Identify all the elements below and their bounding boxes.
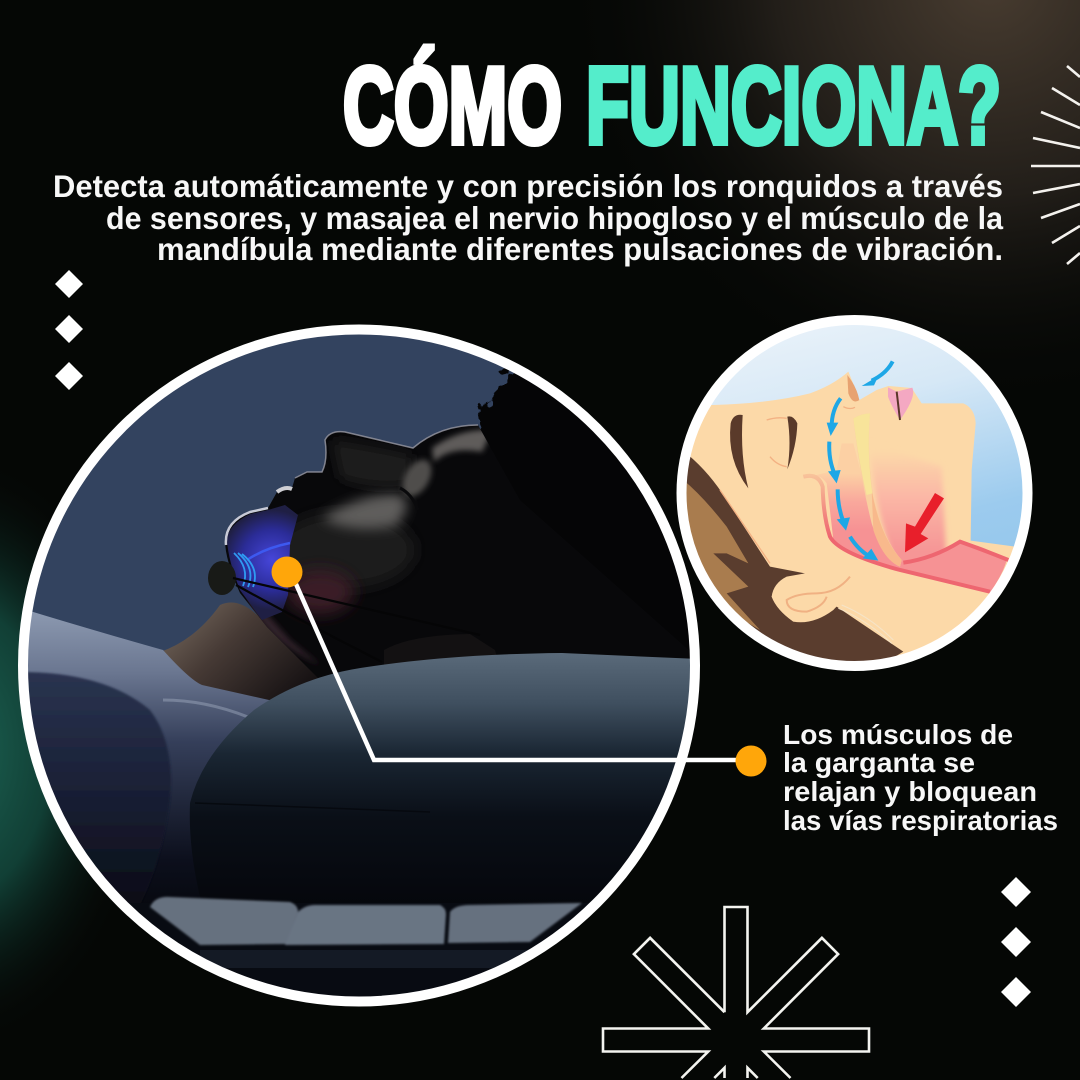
face highlights [248, 430, 492, 665]
inset illustration: airway diagram [670, 310, 1040, 680]
callout text: las vías respiratorias [783, 805, 1058, 836]
face rim light [295, 425, 478, 510]
closed eye and brow [730, 415, 797, 488]
sky background [711, 325, 1022, 546]
callout text: la garganta se [783, 747, 975, 778]
description text: de sensores, y masajea el nervio hipogloso y el músculo de la [106, 200, 1003, 236]
callout text [783, 719, 1058, 836]
hair strands [838, 605, 893, 643]
decoration: outlined asterisk [603, 907, 869, 1078]
hair [686, 457, 904, 661]
callout dot: text anchor [736, 746, 766, 776]
description text: mandíbula mediante diferentes pulsaciones de vibración. [157, 231, 1003, 267]
photo ring [23, 330, 695, 1002]
arrow heads [827, 376, 878, 561]
callout text: relajan y bloquean [783, 776, 1037, 807]
device pod and straps [208, 561, 358, 622]
ear and jaw shadow [384, 634, 496, 664]
pillow [190, 653, 720, 905]
eyelid lines [767, 407, 855, 467]
decoration: right diamonds [1001, 877, 1031, 1007]
neck airway edge [903, 542, 1008, 563]
head silhouette [225, 425, 481, 678]
mattress [130, 896, 588, 996]
airway outline [803, 476, 990, 592]
mouth [888, 387, 913, 420]
red obstruction arrow [905, 493, 944, 552]
photo: sleeping man wearing the device [0, 325, 720, 1010]
nostril [847, 375, 859, 401]
man's hair [478, 368, 690, 651]
ear [772, 573, 850, 622]
callout leader line [296, 584, 745, 760]
description text [53, 168, 1003, 267]
soft palate [853, 413, 902, 567]
decoration: left diamonds [55, 270, 83, 390]
description text: Detecta automáticamente y con precisión los ronquidos a través [53, 168, 1003, 204]
title word: cómo: CÓMO [343, 45, 562, 167]
shirt [28, 612, 270, 903]
callout dot: throat [272, 556, 302, 588]
device glow on chin [226, 488, 298, 620]
inset ring [682, 320, 1028, 666]
decoration: sunburst rays [1031, 66, 1080, 264]
callout text: Los músculos de [783, 719, 1013, 750]
airflow arrows [829, 361, 893, 557]
neck [164, 602, 318, 700]
title [343, 45, 1001, 167]
airway fill [810, 443, 1007, 593]
photo backdrop [32, 334, 514, 650]
skin silhouette [690, 372, 1014, 656]
throat shading [872, 462, 948, 562]
